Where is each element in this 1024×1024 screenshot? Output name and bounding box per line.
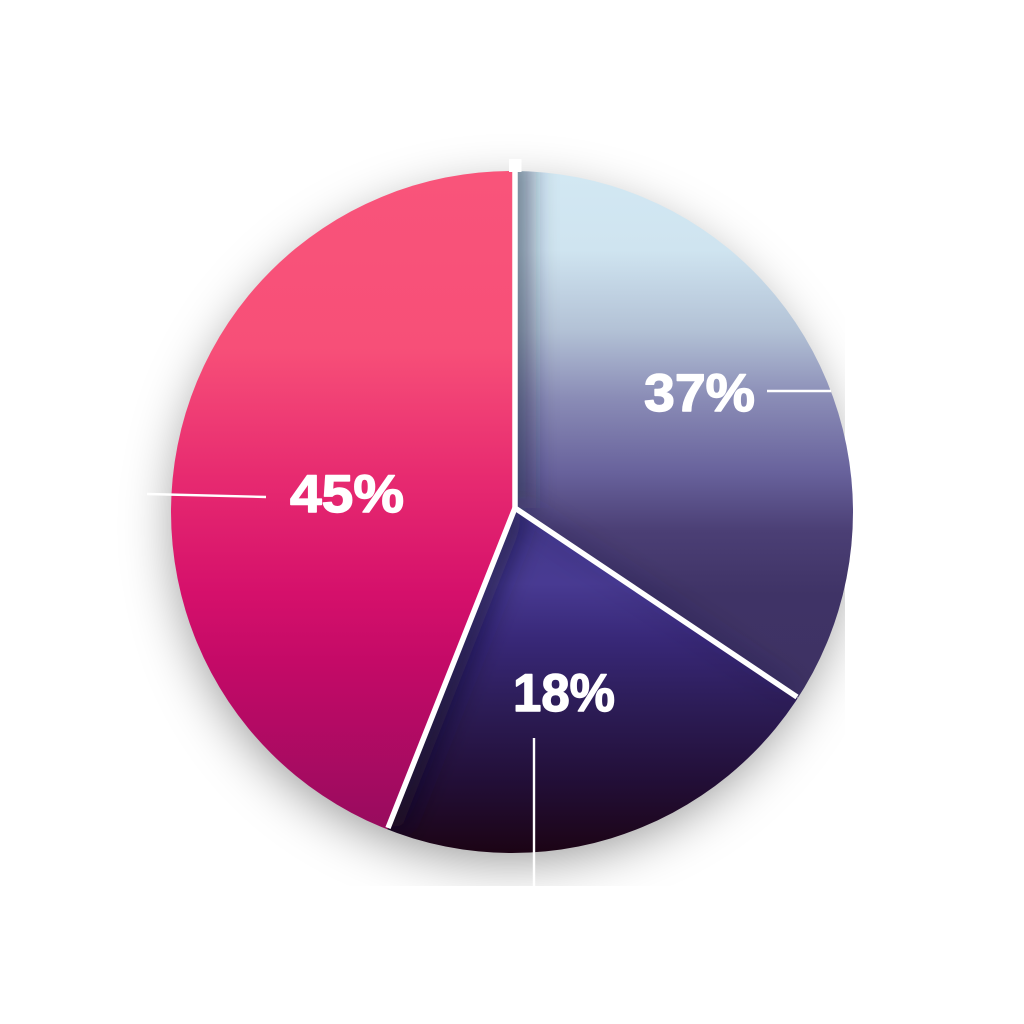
top tab (509, 159, 522, 172)
pie chart infographic (142, 158, 853, 886)
label: 45%: 45% (290, 465, 404, 524)
label: 37%: 37% (644, 364, 755, 423)
label: 18%: 18% (513, 664, 615, 723)
slice: 18% deep purple (387, 512, 798, 853)
pie disc (171, 171, 853, 853)
drop shadow (176, 192, 844, 860)
slice: 37% light blue to indigo (518, 171, 853, 698)
slice separators (388, 172, 797, 828)
label: 45% (147, 465, 404, 524)
slice: 45% pink (171, 171, 512, 830)
